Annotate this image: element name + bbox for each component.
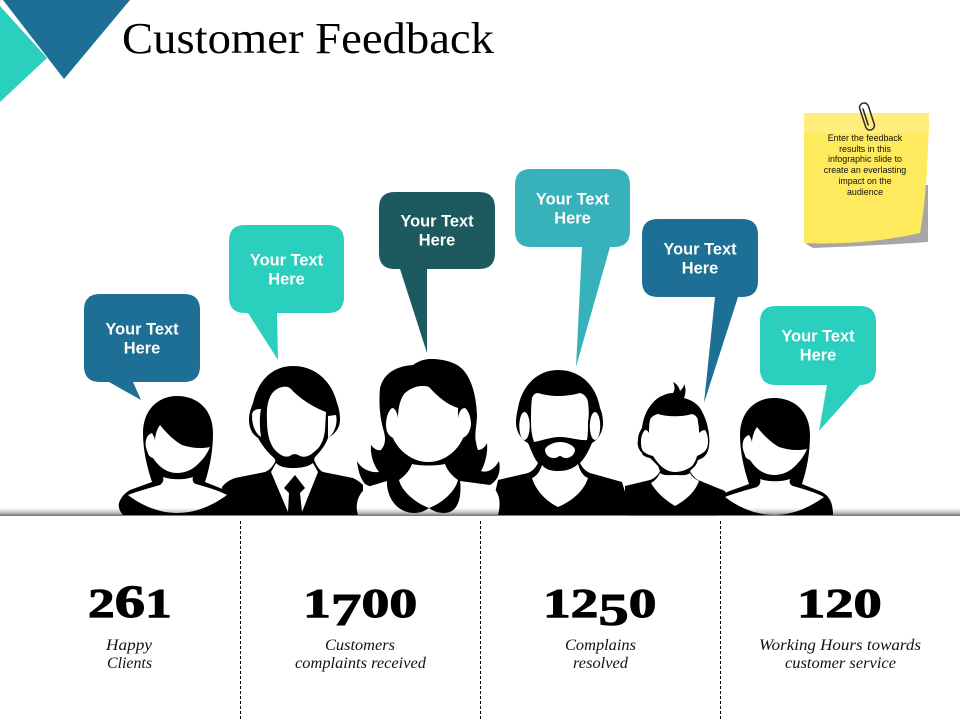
stat: customers complaints received: 7 bbox=[331, 585, 361, 635]
stat: customers complaints received bbox=[295, 580, 426, 672]
speech bubble 3 bbox=[379, 192, 495, 353]
stat label: Clients bbox=[107, 655, 152, 672]
stat: complains resolved bbox=[543, 581, 656, 672]
speech bubble 4 bbox=[515, 169, 630, 367]
stat: working hours: 120 bbox=[797, 580, 882, 626]
title: Customer Feedback bbox=[122, 14, 494, 63]
person 3: woman with long hair bbox=[357, 359, 500, 515]
note text: results in this bbox=[839, 144, 891, 154]
speech bubble 1: Your Text bbox=[105, 320, 179, 338]
speech bubble 6: Here bbox=[800, 346, 836, 364]
stat: complains resolved: 12 bbox=[543, 581, 598, 626]
corner triangles bbox=[0, 0, 130, 102]
speech bubble 3: Here bbox=[419, 232, 455, 250]
stat label: resolved bbox=[573, 655, 628, 672]
speech bubble 1 bbox=[84, 294, 200, 400]
stat label: complaints received bbox=[295, 655, 426, 672]
speech bubble 4: Your Text bbox=[536, 190, 610, 208]
speech bubble 6 bbox=[760, 306, 876, 431]
stat label: customer service bbox=[785, 655, 896, 672]
note text: Enter the feedback bbox=[828, 133, 903, 143]
stat: happy clients bbox=[88, 575, 172, 672]
speech bubble 2 bbox=[229, 225, 344, 360]
stat: complains resolved: 5 bbox=[598, 585, 629, 635]
sticky note bbox=[804, 102, 929, 248]
speech bubble 5 bbox=[642, 219, 758, 403]
person 2: man in suit and tie bbox=[222, 366, 363, 515]
stat label: Working Hours towards bbox=[759, 637, 921, 654]
stat: customers complaints received: 00 bbox=[361, 580, 417, 626]
person 1: woman with short hair bbox=[119, 396, 236, 515]
note text: audience bbox=[847, 187, 883, 197]
stat: working hours bbox=[759, 580, 921, 672]
column dividers bbox=[240, 521, 720, 720]
person 5: boy with spiky hair bbox=[625, 382, 735, 516]
speech bubble 2: Your Text bbox=[250, 252, 324, 270]
stat: customers complaints received: 1 bbox=[303, 580, 331, 626]
speech bubble 2: Here bbox=[268, 270, 305, 288]
stat: complains resolved: 0 bbox=[629, 581, 656, 626]
speech bubble 4: Here bbox=[554, 210, 591, 228]
stat label: Complains bbox=[565, 637, 636, 654]
speech bubble 5: Your Text bbox=[663, 240, 737, 258]
note text: create an everlasting bbox=[824, 165, 906, 175]
speech bubble 6: Your Text bbox=[781, 328, 855, 346]
speech bubble 3: Your Text bbox=[400, 212, 474, 230]
person 4: bearded man bbox=[490, 370, 632, 515]
person 6: woman with short hair bbox=[716, 398, 833, 515]
icon: paperclip bbox=[858, 102, 876, 131]
note text: infographic slide to bbox=[828, 154, 902, 164]
stat label: Customers bbox=[325, 637, 395, 654]
stat: happy clients: 261 bbox=[88, 575, 172, 627]
note text: impact on the bbox=[838, 176, 892, 186]
stat label: Happy bbox=[105, 637, 152, 654]
speech bubble 1: Here bbox=[124, 340, 160, 358]
shelf shadow line bbox=[0, 508, 960, 516]
speech bubble 5: Here bbox=[682, 260, 718, 278]
